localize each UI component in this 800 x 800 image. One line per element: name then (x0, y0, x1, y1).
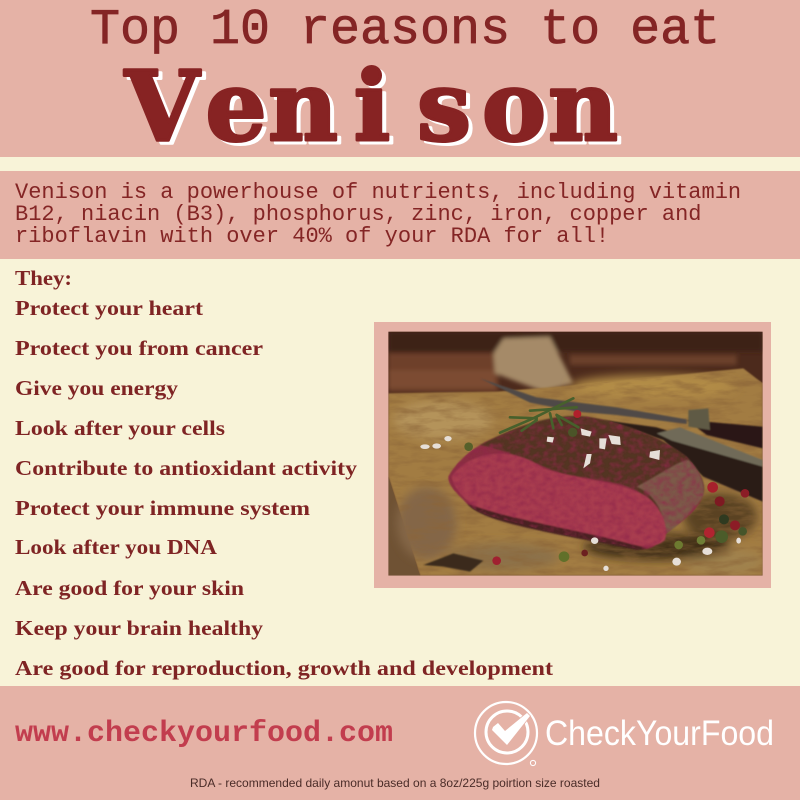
list of ten reasons: Contribute to antioxidant activity (15, 456, 358, 480)
list of ten reasons: Protect your heart (15, 296, 203, 320)
intro text: Venison is a powerhouse of nutrients, including vitamin (15, 180, 741, 205)
salt crystals (420, 428, 741, 571)
list of ten reasons: Look after you DNA (15, 535, 218, 559)
peppercorns (464, 410, 749, 565)
list of ten reasons: Protect your immune system (15, 496, 311, 520)
icon: check mark in circles (475, 702, 537, 766)
list of ten reasons: Protect you from cancer (15, 336, 263, 360)
list of ten reasons (15, 266, 553, 680)
footer band (0, 686, 800, 800)
header band (0, 0, 800, 157)
list of ten reasons: They: (15, 266, 72, 290)
rosemary sprig (500, 398, 578, 433)
footnote: RDA - recommended daily amonut based on a 8oz/225g poirtion size roasted (190, 776, 600, 790)
logo wordmark: CheckYourFood (545, 714, 774, 753)
website url: www.checkyourfood.com (15, 717, 393, 751)
logo: checkyourfood (475, 702, 774, 766)
photo frame (374, 322, 771, 588)
fork and knife (480, 378, 763, 502)
list of ten reasons: Give you energy (15, 376, 179, 400)
photo: venison steak on a wooden board (388, 332, 763, 576)
heading: venison: Venison (128, 53, 622, 166)
intro text: riboflavin with over 40% of your RDA for all! (15, 224, 609, 249)
list of ten reasons: Are good for your skin (15, 576, 244, 600)
intro text panel (0, 171, 800, 259)
intro text: B12, niacin (B3), phosphorus, zinc, iron, copper and (15, 202, 702, 227)
title line: top 10 reasons to eat: Top 10 reasons to eat (90, 2, 720, 59)
list of ten reasons: Look after your cells (15, 416, 225, 440)
heading: venison: Venison (124, 50, 618, 163)
list of ten reasons: Keep your brain healthy (15, 616, 264, 640)
list of ten reasons: Are good for reproduction, growth and development (15, 656, 553, 680)
steak (448, 416, 704, 550)
